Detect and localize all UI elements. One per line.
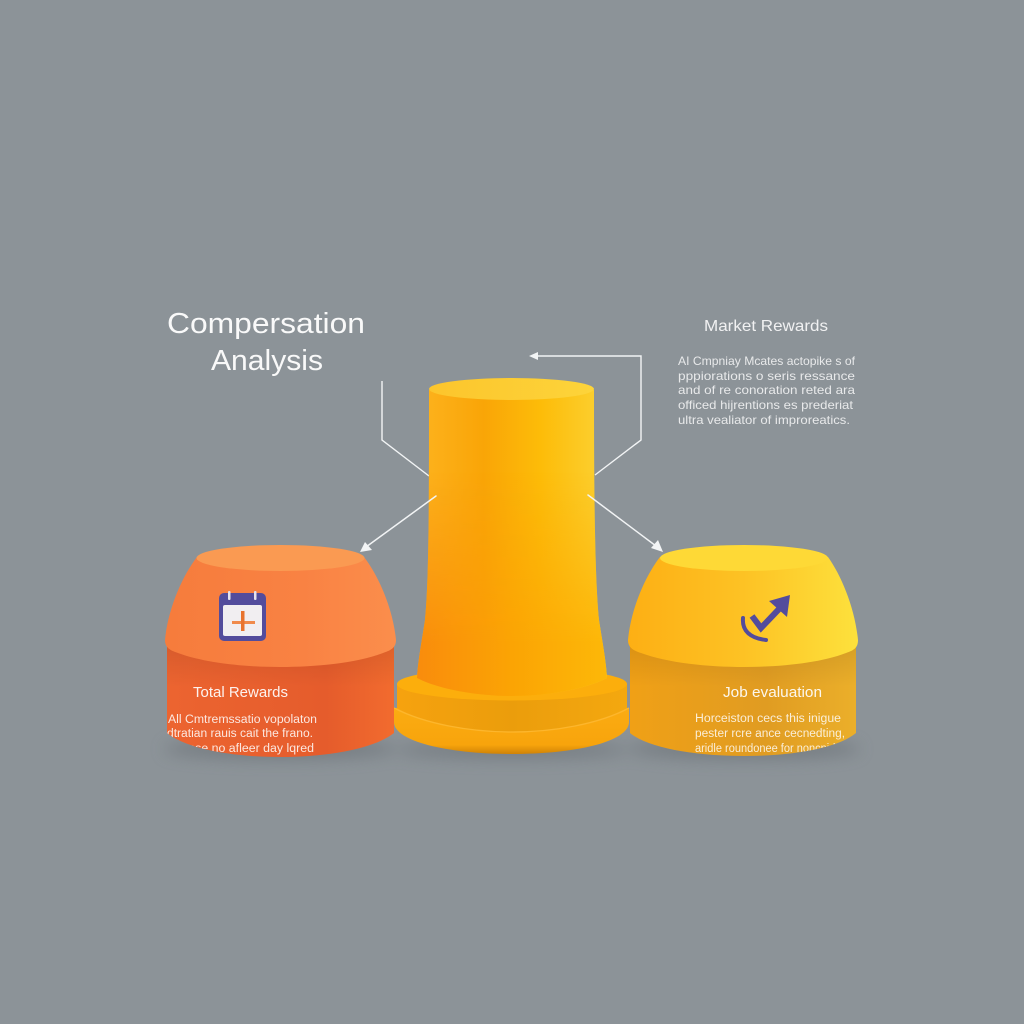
infographic canvas	[165, 312, 858, 762]
arrow: to total rewards	[360, 496, 436, 552]
dome top	[660, 545, 828, 571]
text block: market rewards: officed hijrentions es prederiat	[678, 398, 854, 412]
dome	[165, 557, 396, 667]
cylinder body	[417, 390, 607, 696]
arrow: left connector	[382, 381, 429, 476]
title: Analysis	[211, 345, 323, 377]
heading: total rewards: Total Rewards	[193, 685, 288, 701]
panel: total rewards	[165, 545, 396, 757]
lower band	[167, 640, 394, 757]
text block: job evaluation: pester rcre ance cecnedting,	[695, 728, 845, 740]
title	[167, 308, 365, 377]
central body arrows	[360, 495, 663, 552]
arrow: to market rewards	[529, 352, 641, 475]
connector lines	[382, 352, 641, 476]
text block: job evaluation: Horceiston cecs this inigue	[695, 713, 841, 725]
text block: market rewards	[678, 354, 856, 427]
text block: job evaluation	[695, 713, 847, 755]
text block: market rewards: and of re conoration reted ara	[678, 383, 855, 397]
stepped base	[394, 668, 629, 754]
icon: calendar	[219, 591, 266, 641]
ground shadows	[164, 739, 860, 759]
lower band	[630, 640, 856, 756]
icon: check arrow	[743, 595, 790, 640]
text block: total rewards: dtratian rauis cait the frano.	[167, 728, 313, 740]
dome top	[196, 545, 364, 571]
text block: market rewards: AI Cmpniay Mcates actopike s of	[678, 354, 856, 368]
text block: total rewards: All Cmtremssatio vopolaton	[168, 714, 317, 726]
text block: job evaluation: aridle roundonee for noncnides	[695, 743, 847, 755]
heading: job evaluation: Job evaluation	[723, 685, 822, 701]
title: Compersation	[167, 308, 365, 340]
text block: total rewards	[167, 714, 317, 755]
text block: market rewards: ultra vealiator of improreatics.	[678, 413, 850, 427]
dome	[628, 557, 858, 667]
text block: market rewards: pppiorations o seris ressance	[678, 369, 855, 383]
panel: job evaluation	[628, 545, 858, 756]
arrow: to job evaluation	[588, 495, 663, 552]
cylinder top	[429, 378, 594, 400]
heading: market rewards: Market Rewards	[704, 318, 828, 335]
yellow central cylinder	[394, 378, 629, 754]
text block: total rewards: romase no afleer day lqred	[167, 743, 314, 755]
